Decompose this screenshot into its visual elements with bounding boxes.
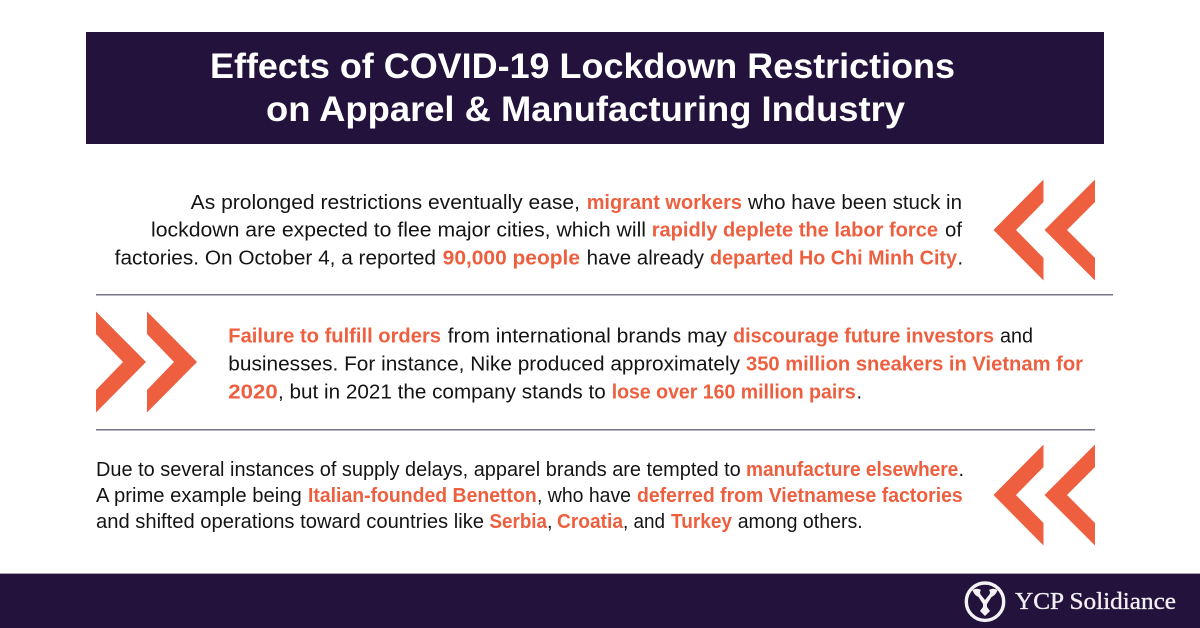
text block: migrant workers: departed Ho Chi Minh City (710, 247, 958, 269)
title banner: Effects of COVID-19 Lockdown Restrictions (210, 47, 955, 86)
text block: failure to fulfill orders: from international brands may (448, 326, 727, 348)
text block: failure to fulfill orders: lose over 160 million pairs (612, 382, 856, 404)
text block: migrant workers: . (958, 247, 963, 269)
divider 1 (96, 294, 1113, 296)
icon: right-pointing double chevron (96, 312, 197, 412)
text block: failure to fulfill orders: Failure to fulfill orders (228, 326, 441, 348)
logo: YCP Solidiance: YCP Solidiance (1015, 589, 1176, 615)
text block: manufacture elsewhere: manufacture elsewhere (746, 459, 958, 481)
text block: manufacture elsewhere: Turkey (671, 511, 733, 533)
text block: failure to fulfill orders: , but in 2021 the company stands to (278, 382, 606, 404)
text block: migrant workers: lockdown are expected to flee major cities, which will (151, 220, 646, 242)
text block: failure to fulfill orders (228, 326, 1083, 404)
logo: YCP Solidiance (966, 583, 1176, 620)
text block: migrant workers: rapidly deplete the labor force (652, 220, 938, 242)
text block: migrant workers: factories. On October 4, a reported (115, 247, 436, 269)
text block: failure to fulfill orders: businesses. For instance, Nike produced approximately (228, 354, 740, 376)
text block: manufacture elsewhere: Croatia (557, 511, 624, 533)
footer bar (0, 573, 1200, 628)
text block: manufacture elsewhere: , who have (537, 485, 631, 507)
text block: manufacture elsewhere (96, 459, 964, 533)
text block: manufacture elsewhere: , (547, 511, 553, 533)
text block: migrant workers: have already (587, 247, 704, 269)
icon: left-pointing double chevron 1 (994, 180, 1095, 280)
text block: migrant workers: who have been stuck in (747, 192, 962, 214)
text block: migrant workers: migrant workers (587, 192, 742, 214)
text block: manufacture elsewhere: Due to several instances of supply delays, apparel brands are tempted to (96, 459, 741, 481)
text block: failure to fulfill orders: 350 million sneakers in Vietnam for (746, 354, 1083, 376)
divider 2 (96, 429, 1095, 430)
text block: manufacture elsewhere: . (958, 459, 964, 481)
text block: migrant workers (115, 192, 963, 269)
text block: manufacture elsewhere: among others. (738, 511, 863, 533)
text block: manufacture elsewhere: A prime example being (96, 485, 302, 507)
text block: failure to fulfill orders: discourage future investors (733, 326, 994, 348)
text block: manufacture elsewhere: Italian-founded Benetton (308, 485, 537, 507)
text block: manufacture elsewhere: , and (623, 511, 665, 533)
icon: left-pointing double chevron 2 (994, 444, 1095, 546)
text block: manufacture elsewhere: and shifted operations toward countries like (96, 511, 484, 533)
text block: migrant workers: 90,000 people (443, 247, 580, 269)
text block: failure to fulfill orders: . (856, 382, 862, 404)
text block: manufacture elsewhere: deferred from Vietnamese factories (637, 485, 963, 507)
title banner (86, 32, 1104, 144)
text block: failure to fulfill orders: and (1000, 326, 1033, 348)
text block: failure to fulfill orders: 2020 (228, 382, 278, 404)
text block: migrant workers: As prolonged restrictions eventually ease, (191, 192, 580, 214)
text block: manufacture elsewhere: Serbia (490, 511, 548, 533)
title banner: on Apparel & Manufacturing Industry (266, 90, 906, 129)
text block: migrant workers: of (945, 220, 962, 242)
